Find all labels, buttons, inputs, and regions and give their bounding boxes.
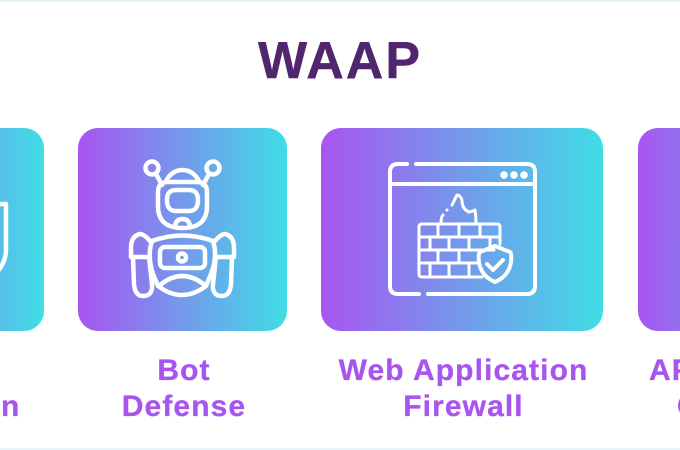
label: web application firewall (338, 354, 588, 423)
label: bot defense: Defense (122, 390, 246, 423)
label: bot defense: Bot (157, 354, 211, 387)
label: web application firewall: Firewall (403, 390, 524, 423)
label: clipped right card (649, 354, 680, 423)
label: bot defense (122, 354, 246, 423)
icon: robot (128, 159, 236, 298)
panel: bot defense (78, 128, 287, 331)
icon: browser window with firewall and shield (388, 162, 537, 296)
panel: web application firewall (321, 128, 603, 331)
label: clipped left card: n (1, 390, 20, 423)
panel: clipped right card (638, 128, 680, 331)
icon: shield fragment (0, 202, 8, 272)
label: web application firewall: Web Application (339, 354, 588, 387)
title: WAAP (258, 32, 422, 90)
panel: clipped left card (0, 128, 44, 331)
